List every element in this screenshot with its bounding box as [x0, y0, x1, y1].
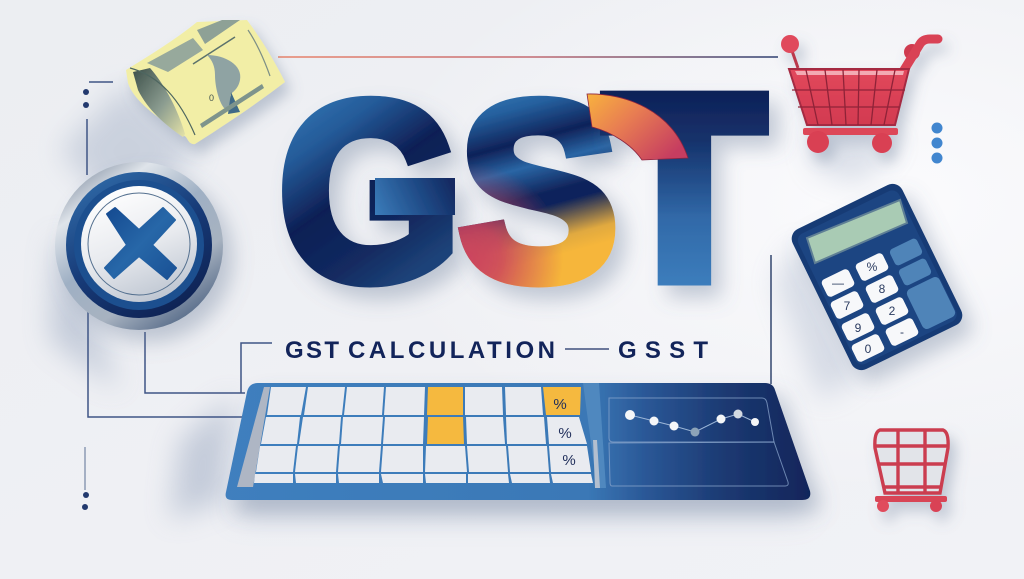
- letter T: T: [605, 44, 764, 334]
- chart screen frames: [609, 398, 788, 486]
- left dots top: [83, 89, 89, 108]
- caption: GST CALCULATION: [285, 337, 708, 364]
- letter S: S: [459, 50, 618, 331]
- key labels: -: [900, 325, 904, 339]
- connector lines: [85, 57, 778, 490]
- right dots: [932, 122, 942, 164]
- title: GST: [282, 90, 790, 308]
- accent: S terminal arc: [587, 94, 688, 160]
- letter S: S: [459, 50, 618, 331]
- panel: table and chart: [226, 383, 810, 500]
- key labels: 9: [855, 321, 862, 335]
- key labels: 0: [865, 342, 872, 356]
- banknote serial mark: 0: [209, 93, 214, 103]
- caption: GST CALCULATION: GST: [285, 337, 339, 364]
- divider strip: [583, 383, 606, 488]
- key labels: 7: [844, 299, 851, 313]
- percent labels: %: [562, 452, 576, 469]
- icon: shopping cart small: [875, 430, 948, 512]
- icon: calculator: [788, 180, 966, 374]
- key labels: %: [867, 260, 878, 274]
- keys: [820, 252, 920, 363]
- icon: shopping cart large: [781, 35, 938, 153]
- highlighted cells: [427, 387, 581, 444]
- percent labels: %: [558, 425, 572, 442]
- letter S: [458, 96, 635, 308]
- key labels: 2: [889, 304, 896, 318]
- screen: [807, 200, 907, 263]
- key labels: 8: [879, 282, 886, 296]
- caption: GST CALCULATION: CALCULATION: [348, 337, 555, 364]
- letter G: G: [279, 52, 461, 332]
- table grid: [254, 387, 593, 483]
- line chart: [625, 410, 759, 436]
- icon: rolled banknote: [126, 20, 285, 144]
- left dots bottom: [82, 492, 89, 510]
- percent labels: [553, 396, 576, 469]
- icon: X button: [55, 162, 223, 330]
- percent labels: %: [553, 396, 567, 413]
- key labels: —: [832, 276, 844, 290]
- strip left: [237, 387, 270, 487]
- key labels: [832, 260, 904, 356]
- caption: GST CALCULATION: GSST: [618, 337, 708, 364]
